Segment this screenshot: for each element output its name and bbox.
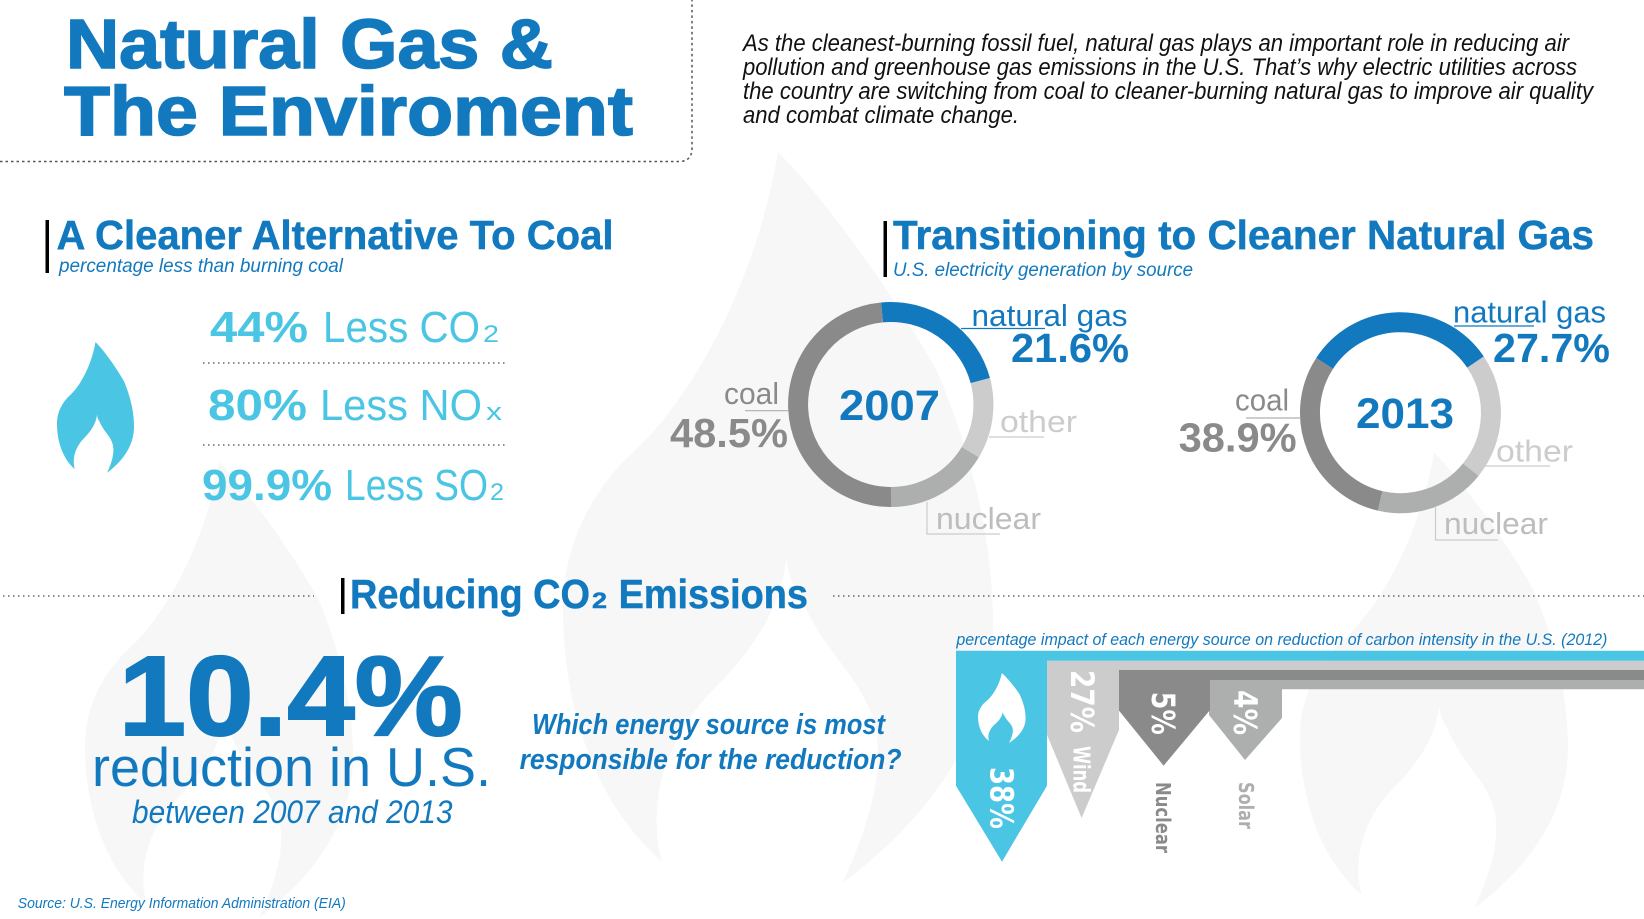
value: 4%: 4% <box>1226 690 1264 735</box>
question text: responsible for the reduction? <box>520 744 902 776</box>
chart caption: percentage impact of each energy source on reduction of carbon intensity in the U.S. (2012) <box>955 631 1607 649</box>
label: Solar: Solar <box>1234 782 1258 829</box>
intro text block: the country are switching from coal to cleaner-burning natural gas to improve air quality <box>743 78 1595 105</box>
label: natural gas 2007: natural gas <box>972 298 1128 333</box>
big stat: 10.4%: 10.4% <box>119 633 463 759</box>
panel: a cleaner alternative to coal <box>46 212 614 510</box>
heading: Transitioning to Cleaner Natural Gas <box>893 212 1594 258</box>
title box with dashed border <box>0 0 692 162</box>
stat: NOx: 80% <box>208 381 307 430</box>
question text <box>520 709 902 776</box>
stat: CO2: 44% <box>210 303 308 352</box>
label: nuclear 2013: nuclear <box>1444 506 1548 541</box>
donut chart: 2013 <box>1310 322 1491 503</box>
intro text block: and combat climate change. <box>743 102 1019 129</box>
intro text block: As the cleanest-burning fossil fuel, natural gas plays an important role in reducing air <box>741 30 1570 57</box>
intro text block <box>741 30 1595 129</box>
stat: NOx: x <box>486 399 502 426</box>
stat: CO2: Less CO <box>323 303 480 352</box>
donut year 2007: 2007 <box>839 382 940 430</box>
ribbon chart: energy source impact <box>956 651 1644 862</box>
heading marker bar <box>884 221 887 277</box>
label: natural gas 2007 <box>961 298 1129 371</box>
stat: SO2 <box>202 461 504 510</box>
value: 5%: 5% <box>1144 692 1182 735</box>
label: coal 2013 <box>1179 383 1300 461</box>
donut chart: 2007 <box>798 312 983 497</box>
heading: A Cleaner Alternative To Coal <box>56 212 614 258</box>
heading: Reducing CO <box>350 571 590 617</box>
value: 38%: 38% <box>983 767 1021 829</box>
icon: ghost flame centre <box>563 152 993 883</box>
label: coal 2007: 48.5% <box>670 410 788 456</box>
ribbon: natural gas 38% <box>956 651 1644 862</box>
donut year 2013: 2013 <box>1356 390 1454 438</box>
stat: CO2 <box>210 303 499 352</box>
label: coal 2007: coal <box>724 376 779 411</box>
heading <box>350 571 808 617</box>
ribbon: solar 4% <box>1209 680 1644 760</box>
label: other 2007: other <box>1000 404 1077 439</box>
text: reduction in U.S.: reduction in U.S. <box>92 736 491 798</box>
heading: 2 <box>592 588 607 613</box>
background ghost flames <box>85 152 1568 918</box>
question text: Which energy source is most <box>532 709 886 741</box>
heading marker bar <box>341 578 344 614</box>
stat: SO2: 2 <box>490 479 504 506</box>
panel: transitioning to cleaner natural gas <box>670 212 1610 541</box>
text: between 2007 and 2013: between 2007 and 2013 <box>132 794 453 830</box>
source note: Source: U.S. Energy Information Administration (EIA) <box>18 895 346 912</box>
stat: SO2: 99.9% <box>202 461 332 510</box>
label: natural gas 2007: 21.6% <box>1011 325 1129 371</box>
ribbon: nuclear 5% <box>1118 670 1644 766</box>
label: Nuclear: Nuclear <box>1151 782 1175 853</box>
label: coal 2013: 38.9% <box>1179 415 1297 461</box>
title: Natural Gas & <box>66 5 553 83</box>
label: other 2013: other <box>1496 434 1573 469</box>
panel: reducing CO2 emissions <box>3 571 1644 862</box>
label: natural gas 2013 <box>1453 295 1610 371</box>
heading: Emissions <box>619 571 808 617</box>
icon: white flame <box>978 673 1026 743</box>
icon: blue flame <box>57 342 134 473</box>
ribbon: wind 27% <box>1045 661 1644 818</box>
title <box>64 5 633 150</box>
heading marker bar <box>46 220 49 273</box>
label: Wind: Wind <box>1067 746 1093 793</box>
intro text block: pollution and greenhouse gas emissions in the U.S. That’s why electric utilities across <box>742 54 1577 81</box>
label: nuclear 2007: nuclear <box>936 501 1041 536</box>
stat: NOx: Less NO <box>320 381 482 430</box>
subheading: U.S. electricity generation by source <box>893 260 1193 281</box>
icon: ghost flame right <box>1300 453 1568 908</box>
stat: CO2: 2 <box>483 321 499 348</box>
stat: NOx <box>208 381 502 430</box>
label: natural gas 2013: natural gas <box>1453 295 1606 330</box>
subheading: percentage less than burning coal <box>58 256 344 277</box>
value: 27%: 27% <box>1063 670 1101 733</box>
label: coal 2007 <box>670 376 789 456</box>
label: natural gas 2013: 27.7% <box>1493 325 1610 371</box>
stat: SO2: Less SO <box>345 461 488 510</box>
title: The Enviroment <box>64 72 633 150</box>
icon: ghost flame left <box>85 462 353 918</box>
label: coal 2013: coal <box>1235 383 1289 418</box>
